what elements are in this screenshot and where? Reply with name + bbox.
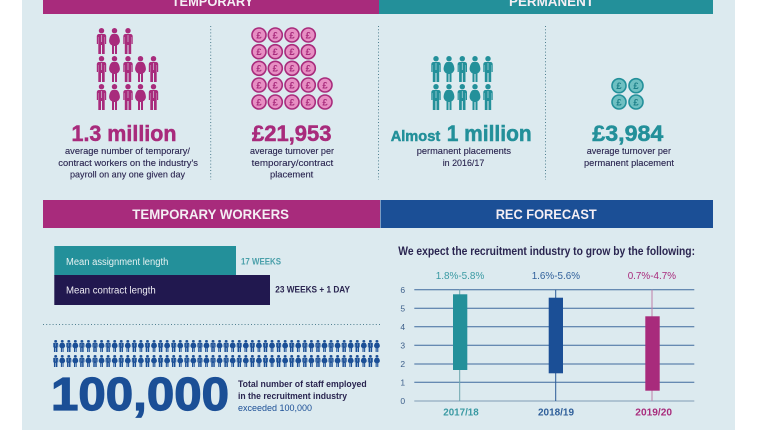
stat: £3,984: £3,984 [592, 121, 664, 146]
stat: almost 1 million: 1 million [447, 121, 532, 146]
forecast range chart: 2019/20 [635, 408, 672, 419]
forecast range chart: 2 [400, 359, 405, 369]
header: temporary [43, 0, 379, 14]
forecast range chart: 5 [400, 304, 405, 314]
forecast range chart: 1.6%-5.6% [532, 270, 580, 282]
icon: temporary turnover coins: £ [306, 64, 312, 75]
stat: almost 1 million [391, 121, 532, 169]
icon: 10 permanent workers [431, 56, 493, 110]
stat: 1.3 million: 1.3 million [72, 121, 176, 146]
icon: rows of staff [53, 340, 380, 367]
icon: permanent turnover coins: £ [616, 81, 622, 92]
stat: 1.3 million [58, 121, 198, 181]
stat: 100,000 staff: in the recruitment industry [238, 391, 348, 402]
icon: temporary turnover coins: £ [322, 80, 328, 91]
bar: mean contract length [54, 275, 351, 305]
icon: permanent turnover coins: £ [616, 97, 622, 108]
icon: temporary turnover coins [252, 28, 332, 109]
icon: temporary turnover coins: £ [289, 30, 295, 41]
header: rec forecast: REC FORECAST [496, 206, 597, 222]
stat: £21,953: temporary/contract [252, 158, 334, 169]
icon: temporary turnover coins: £ [306, 97, 312, 108]
icon: temporary turnover coins: £ [273, 47, 279, 58]
stat: £21,953: average turnover per [250, 146, 334, 157]
bar: mean contract length: 23 WEEKS + 1 DAY [275, 285, 351, 296]
stat: £3,984: permanent placement [584, 158, 674, 169]
forecast heading: We expect the recruitment industry to grow by the following: [398, 246, 695, 258]
bar: mean assignment length: Mean assignment length [66, 257, 168, 268]
forecast range chart: 6 [400, 285, 405, 295]
bar: mean assignment length [54, 246, 281, 276]
icon: temporary turnover coins: £ [256, 80, 262, 91]
forecast range chart: 0.7%-4.7% [628, 270, 676, 282]
header: permanent [379, 0, 713, 14]
stat: £21,953 [250, 121, 334, 181]
stat: £21,953: placement [270, 170, 314, 181]
forecast range chart: 4 [400, 322, 405, 332]
stat: 100,000 staff: 100,000 [51, 368, 229, 420]
stat: 100,000 staff: exceeded 100,000 [238, 403, 312, 414]
forecast range chart [400, 270, 694, 419]
icon: temporary turnover coins: £ [256, 47, 262, 58]
forecast range chart: 2017/18 [443, 408, 479, 419]
icon: temporary turnover coins: £ [289, 97, 295, 108]
icon: temporary turnover coins: £ [273, 97, 279, 108]
icon: temporary turnover coins: £ [289, 80, 295, 91]
icon: permanent turnover coins: £ [633, 81, 639, 92]
icon: temporary turnover coins: £ [306, 80, 312, 91]
stat: almost 1 million: permanent placements [417, 146, 511, 157]
stat: £3,984: average turnover per [587, 146, 671, 157]
icon: temporary turnover coins: £ [289, 64, 295, 75]
icon: temporary turnover coins: £ [273, 30, 279, 41]
icon: temporary turnover coins: £ [256, 30, 262, 41]
icon: permanent turnover coins [612, 79, 643, 109]
stat: 1.3 million: payroll on any one given day [70, 170, 185, 181]
header: temporary workers [43, 200, 380, 228]
stat: £21,953: £21,953 [252, 121, 332, 146]
icon: permanent turnover coins: £ [633, 97, 639, 108]
icon: temporary turnover coins: £ [322, 97, 328, 108]
stat: £3,984 [584, 121, 674, 169]
header: rec forecast [380, 200, 713, 228]
icon: 13 temporary workers [97, 28, 158, 110]
forecast range chart: 1 [400, 378, 405, 388]
bar: mean contract length: Mean contract length [66, 286, 156, 297]
icon: temporary turnover coins: £ [273, 64, 279, 75]
stat: almost 1 million: in 2016/17 [443, 158, 484, 169]
icon: temporary turnover coins: £ [256, 97, 262, 108]
forecast range chart: 1.8%-5.8% [436, 270, 484, 282]
forecast range chart: 0 [400, 396, 405, 406]
icon: temporary turnover coins: £ [306, 30, 312, 41]
forecast range chart: 2018/19 [538, 408, 574, 419]
bar: mean assignment length: 17 WEEKS [241, 256, 281, 268]
forecast range chart: 3 [400, 340, 405, 350]
stat: 100,000 staff: Total number of staff employed [238, 379, 367, 390]
icon: temporary turnover coins: £ [273, 80, 279, 91]
stat: almost 1 million: Almost [391, 128, 440, 145]
header: temporary workers: TEMPORARY WORKERS [132, 206, 289, 222]
icon: temporary turnover coins: £ [306, 47, 312, 58]
stat: 100,000 staff [51, 368, 367, 420]
stat: 1.3 million: average number of temporary/ [65, 146, 190, 157]
stat: 1.3 million: contract workers on the industry's [58, 158, 198, 169]
icon: temporary turnover coins: £ [289, 47, 295, 58]
icon: temporary turnover coins: £ [256, 64, 262, 75]
